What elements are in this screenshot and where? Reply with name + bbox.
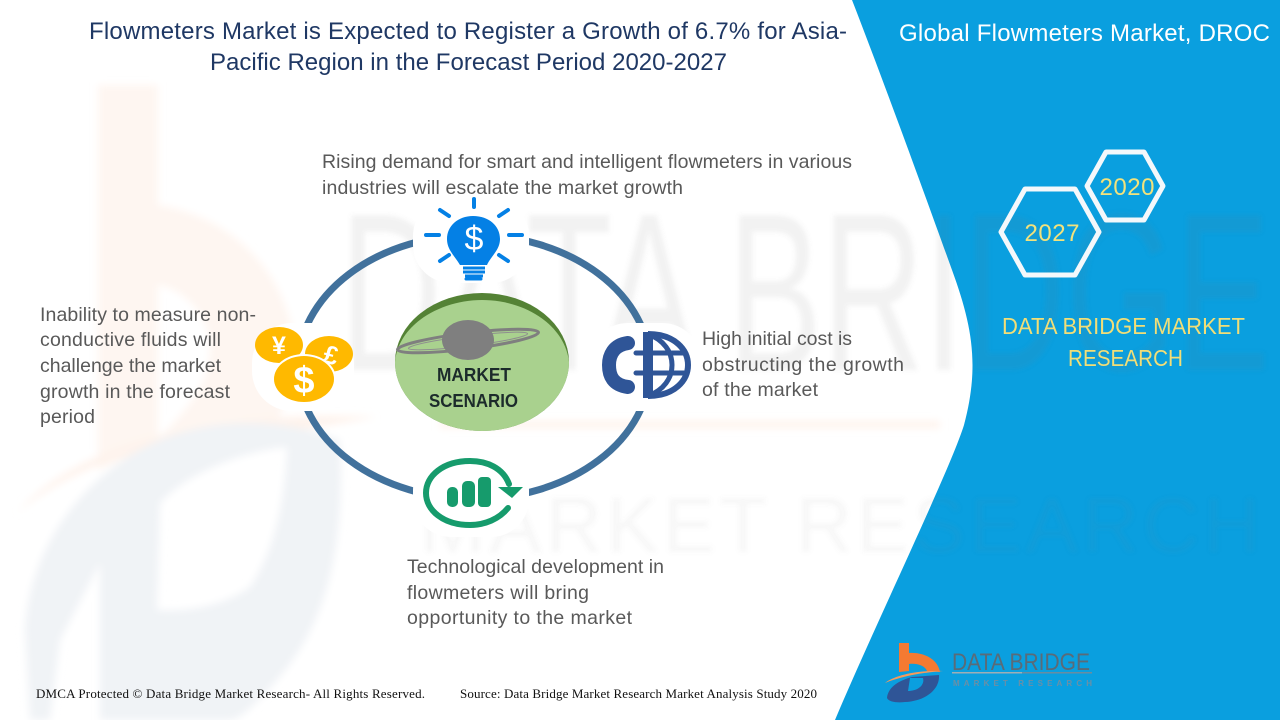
title [89,18,847,76]
center label: MARKET [437,365,511,385]
text: driver [322,151,852,199]
text: restraint high initial cost: High initial cost is [702,328,852,350]
logo: Data Bridge Market Research [885,643,1092,702]
planet icon [397,320,539,360]
icon: light bulb with dollar [426,199,522,279]
watermark: large lettering: MARKET RESEARCH [420,481,1260,569]
text: driver: industries will escalate the market growth [322,177,683,199]
logo: Data Bridge Market Research: MARKET RESEARCH [953,679,1092,688]
icon: currency coins: £ [320,339,342,371]
icon: growth chart with arrow [426,461,523,525]
title: Flowmeters Market is Expected to Register a Growth of 6.7% for Asia- [89,18,847,45]
hexagon: 2027: 2027 [1024,220,1080,247]
brand name: Data Bridge Market Research: RESEARCH [1068,345,1183,371]
text: opportunity: opportunity to the market [407,607,633,629]
icon: light bulb with dollar: $ [465,220,484,258]
footer: copyright: DMCA Protected © Data Bridge Market Research- All Rights Reserved. [36,686,425,701]
center label: SCENARIO [429,391,518,411]
text: challenge: challenge the market [40,355,222,377]
hexagon: 2020 [1087,152,1163,220]
hexagon: 2020: 2020 [1100,174,1154,201]
text: restraint high initial cost: obstructing the growth [702,354,904,376]
cycle ring [252,198,702,537]
watermark: pale logo [17,85,940,720]
text: challenge [40,304,256,428]
text: driver: Rising demand for smart and intelligent flowmeters in various [322,151,852,173]
icon: currency coins: $ [293,360,315,402]
footer: source: Source: Data Bridge Market Research Market Analysis Study 2020 [460,686,817,701]
text: opportunity [407,556,664,629]
icon: currency coins [255,327,353,404]
text: restraint high initial cost: of the market [702,379,819,401]
brand name: Data Bridge Market Research: DATA BRIDGE MARKET [1002,313,1245,339]
text: opportunity: flowmeters will bring [407,582,589,604]
center: market scenario globe [395,293,569,431]
icon: currency coins: ¥ [272,332,286,360]
text: challenge: period [40,406,95,428]
icon: phone and globe [609,332,688,398]
text: challenge: growth in the forecast [40,381,231,403]
panel: blue right side [835,0,1280,720]
watermark: large lettering [340,166,1270,569]
text: opportunity: Technological development in [407,556,664,578]
center label [429,365,518,411]
logo: Data Bridge Market Research: DATA BRIDGE [952,649,1090,676]
title: Pacific Region in the Forecast Period 2020-2027 [210,49,727,76]
panel heading: Global Flowmeters Market, DROC: Global Flowmeters Market, DROC [899,20,1270,47]
text: challenge: conductive fluids will [40,329,221,351]
text: challenge: Inability to measure non- [40,304,256,326]
hexagon: 2027 [1001,189,1099,275]
text: restraint high initial cost [702,328,904,401]
brand name: Data Bridge Market Research [1002,313,1245,371]
